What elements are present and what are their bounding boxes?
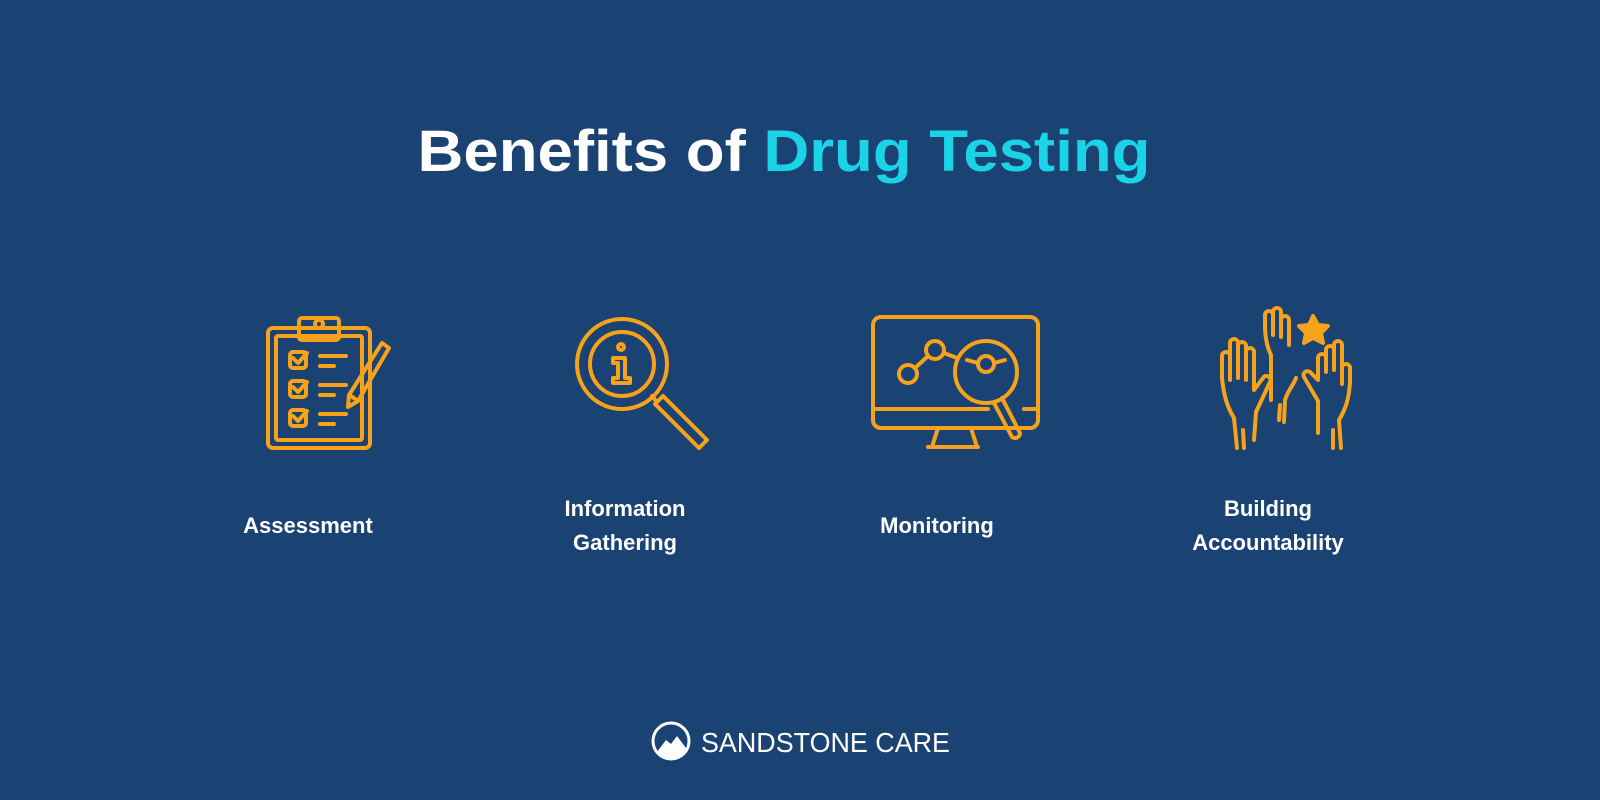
- icon: magnifier info: [577, 319, 707, 448]
- logo: Sandstone Care: SANDSTONE CARE: [701, 727, 950, 758]
- label: Assessment: Assessment: [243, 513, 373, 538]
- title: Benefits of Drug Testing: [418, 119, 1150, 184]
- logo: Sandstone Care: [653, 723, 950, 760]
- label: Information Gathering: Gathering: [573, 530, 677, 555]
- label: Monitoring: Monitoring: [880, 513, 994, 538]
- icon: clipboard checklist: [268, 318, 389, 448]
- label: Information Gathering: Information: [564, 496, 686, 521]
- icon: monitor analytics: [873, 317, 1038, 447]
- label: Building Accountability: Accountability: [1192, 530, 1345, 555]
- icon: raised hands with star: [1222, 308, 1350, 448]
- label: Building Accountability: Building: [1224, 496, 1312, 521]
